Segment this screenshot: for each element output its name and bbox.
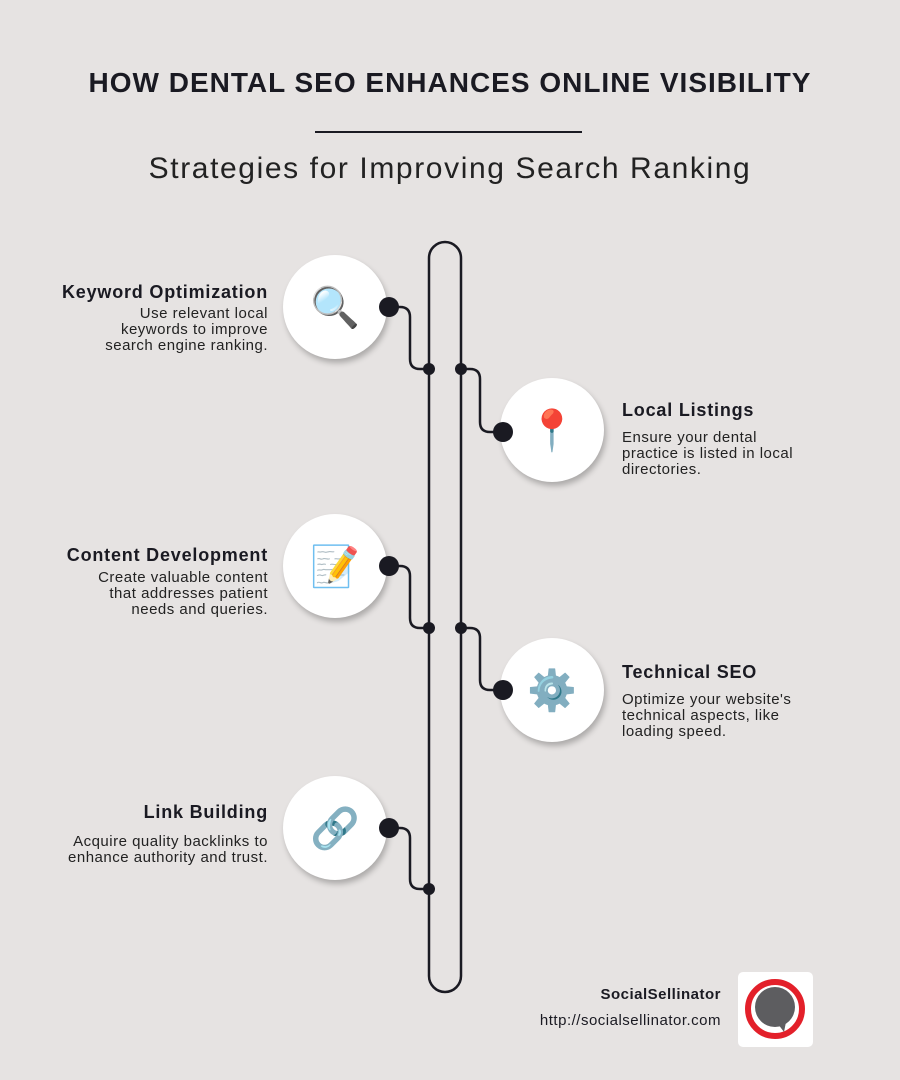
panel: link building: Acquire quality backlinks to enhance authority and trust.: [68, 833, 268, 866]
panel: keyword optimization: [62, 255, 392, 366]
footer brand: [540, 986, 721, 1029]
icon: pin: 📍: [527, 408, 577, 452]
panel: local listings: [500, 378, 793, 489]
icon: gear: ⚙️: [527, 668, 577, 712]
logo: [738, 972, 813, 1047]
panel: keyword optimization: Keyword Optimization: [62, 282, 268, 302]
panel: content development: Content Development: [67, 545, 268, 565]
panel: technical seo: [500, 638, 791, 749]
panel: local listings: Ensure your dental practice is listed in local directories.: [622, 429, 793, 478]
icon: pin: [500, 378, 604, 482]
icon: memo: [283, 514, 387, 618]
panel: link building: [68, 776, 392, 887]
subtitle: Strategies for Improving Search Ranking: [149, 152, 751, 185]
panel: keyword optimization: Use relevant local keywords to improve search engine ranking.: [105, 305, 268, 354]
footer brand: http://socialsellinator.com: [540, 1012, 721, 1029]
title: HOW DENTAL SEO ENHANCES ONLINE VISIBILITY: [89, 67, 811, 98]
panel: content development: Create valuable content that addresses patient needs and queries.: [98, 569, 268, 618]
icon: link: [283, 776, 387, 880]
icon: gear: [500, 638, 604, 742]
panel: technical seo: Optimize your website's technical aspects, like loading speed.: [622, 691, 791, 740]
panel: technical seo: Technical SEO: [622, 662, 757, 682]
panel: local listings: Local Listings: [622, 400, 754, 420]
icon: link: 🔗: [310, 806, 360, 850]
icon: magnifier: 🔍: [310, 286, 360, 330]
icon: magnifier: [283, 255, 387, 359]
panel: link building: Link Building: [144, 802, 268, 822]
footer brand: SocialSellinator: [600, 986, 721, 1003]
panel: content development: [67, 514, 392, 625]
icon: memo: 📝: [310, 544, 360, 588]
